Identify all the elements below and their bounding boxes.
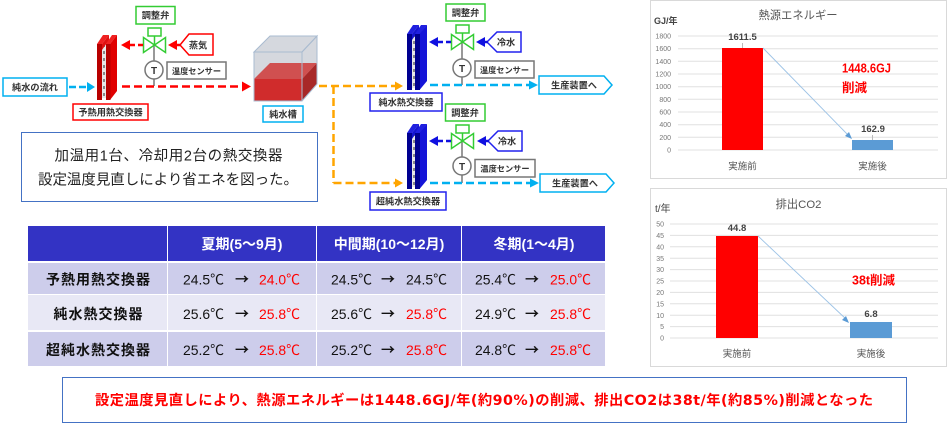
label: temperature sensor [167, 62, 226, 79]
row: preheat exchanger: 25.4℃ [475, 272, 516, 288]
icon: valve and temperature sensor [452, 25, 474, 85]
icon: valve and temperature sensor [452, 125, 474, 183]
y axis labels: 1400 [655, 59, 671, 66]
arrows: cold water flow [429, 136, 489, 146]
callout: 38t reduction: 38t削減 [852, 272, 895, 288]
row: preheat exchanger: 24.5℃ [183, 272, 224, 288]
bar: before [722, 48, 763, 150]
y axis labels: 20 [656, 290, 664, 297]
y axis labels: 5 [660, 324, 664, 331]
label: control valve [446, 4, 485, 21]
row: preheat exchanger: → [235, 270, 249, 290]
value labels: 1611.5 [728, 32, 757, 43]
y axis labels: 1000 [655, 84, 671, 91]
axis unit: t/年 [655, 202, 671, 215]
y axis labels: 400 [659, 122, 671, 129]
label: ultra-pure water exchanger [370, 192, 446, 210]
arrows: orange supply lines [319, 82, 403, 188]
y axis labels: 45 [656, 233, 664, 240]
label: temperature sensor: 温度センサー [480, 65, 529, 75]
row: ultra-pure water exchanger: 超純水熱交換器 [46, 342, 150, 358]
callout: 1448.6GJ reduction: 削減 [842, 80, 868, 95]
row: preheat exchanger: 24.0℃ [259, 272, 300, 288]
label: control valve [136, 6, 175, 24]
chart title: 排出CO2 [776, 197, 821, 211]
y axis labels: 1600 [655, 46, 671, 53]
y axis labels: 1200 [655, 72, 671, 78]
row: pure water exchanger: → [381, 304, 395, 324]
callout: 1448.6GJ reduction: 1448.6GJ [842, 62, 891, 76]
bar chart: CO2 emissions [650, 188, 946, 366]
row: preheat exchanger: → [381, 270, 395, 290]
row: pure water exchanger: 25.8℃ [406, 306, 447, 322]
y axis labels: 35 [656, 256, 664, 263]
y axis labels: 1800 [655, 34, 671, 40]
icon: valve and temperature sensor: T [151, 66, 157, 77]
label: temperature sensor: 温度センサー [172, 66, 221, 76]
y axis labels: 200 [659, 135, 671, 142]
y axis labels: 30 [656, 267, 664, 274]
row: pure water exchanger: 25.6℃ [331, 306, 372, 322]
label: control valve: 調整弁 [142, 10, 169, 20]
label: cold water: 冷水 [498, 136, 516, 146]
label: pure water tank: 純水槽 [269, 108, 297, 120]
row: ultra-pure water exchanger: 25.2℃ [331, 342, 372, 358]
label: control valve: 調整弁 [452, 7, 479, 18]
y axis labels [656, 222, 664, 342]
row: ultra-pure water exchanger: 25.2℃ [183, 342, 224, 358]
label: preheat exchanger: 予熱用熱交換器 [78, 106, 143, 118]
row: pure water exchanger: 純水熱交換器 [54, 306, 142, 322]
arrows: cold water flow [429, 37, 488, 47]
callout: conclusion [62, 378, 906, 422]
bar chart: heat source energy [650, 0, 946, 178]
y axis labels: 40 [656, 244, 664, 252]
chart title: 熱源エネルギー [758, 8, 838, 22]
icon: ultra-pure water exchanger [407, 124, 427, 189]
label: to production equipment: 生産装置へ [552, 178, 598, 188]
y axis labels: 800 [659, 97, 671, 104]
row: preheat exchanger: → [525, 270, 539, 290]
row: ultra-pure water exchanger: → [235, 340, 249, 360]
row: ultra-pure water exchanger: 24.8℃ [475, 342, 516, 358]
category labels [723, 348, 886, 360]
label: steam [180, 34, 213, 55]
y axis labels: 25 [656, 278, 664, 286]
row: pure water exchanger [28, 295, 605, 330]
icon: valve and temperature sensor: T [459, 162, 465, 173]
bar: after [850, 322, 892, 338]
row: ultra-pure water exchanger: → [525, 340, 539, 360]
y axis labels: 600 [659, 110, 671, 116]
table header: 冬期(1～4月) [494, 236, 574, 252]
table header: 中間期(10～12月) [334, 236, 444, 252]
label: steam: 蒸気 [189, 40, 207, 50]
arrow: to production equipment [430, 80, 538, 90]
axis unit: GJ/年 [654, 15, 678, 26]
label: temperature sensor [475, 61, 534, 78]
icon: pure water exchanger [407, 25, 427, 90]
row: ultra-pure water exchanger: 25.8℃ [550, 342, 591, 358]
y axis labels: 0 [660, 336, 664, 342]
row: preheat exchanger: 25.0℃ [550, 272, 591, 288]
category labels: 実施後 [857, 348, 886, 360]
unit: pure water heat exchanger [370, 4, 612, 111]
label: preheat exchanger [73, 104, 148, 120]
row: pure water exchanger: → [525, 304, 539, 324]
table header [28, 226, 605, 261]
text block: explanation note: 設定温度見直しにより省エネを図った。 [38, 172, 298, 188]
label: to production equipment [539, 76, 612, 94]
row: pure water exchanger: 24.9℃ [475, 306, 516, 322]
callout: 1448.6GJ reduction [842, 62, 891, 95]
label: temperature sensor: 温度センサー [480, 164, 530, 174]
label: to production equipment: 生産装置へ [551, 80, 597, 90]
arrow: reduction trend [758, 236, 849, 323]
row: ultra-pure water exchanger: 25.8℃ [259, 342, 300, 358]
y axis labels: 10 [656, 313, 664, 320]
row: ultra-pure water exchanger: 25.8℃ [406, 342, 447, 358]
label: ultra-pure water exchanger: 超純水熱交換器 [376, 196, 441, 206]
row: pure water exchanger: 25.8℃ [259, 306, 300, 322]
category labels [728, 160, 887, 172]
unit: ultra-pure water heat exchanger [370, 104, 614, 210]
value labels [728, 223, 878, 320]
panel: temperature setting table [28, 226, 605, 366]
category labels: 実施前 [728, 160, 757, 172]
label: cold water [487, 32, 521, 52]
row: ultra-pure water exchanger [28, 332, 605, 366]
bar: after [852, 140, 893, 150]
y axis labels: 0 [667, 148, 671, 154]
icon: preheat heat exchanger [97, 35, 117, 100]
arrows: steam flow [121, 40, 180, 50]
label: temperature sensor [475, 160, 535, 177]
row: preheat exchanger: 24.5℃ [406, 272, 447, 288]
row: pure water exchanger: 25.6℃ [183, 306, 224, 322]
text block: explanation note [22, 132, 318, 202]
arrow: reduction trend [763, 48, 852, 139]
label: pure water exchanger [370, 93, 442, 111]
label: control valve [446, 104, 485, 121]
label: pure water tank [263, 106, 303, 122]
category labels: 実施前 [723, 348, 751, 360]
value labels: 44.8 [728, 223, 746, 234]
bar: before [716, 236, 758, 338]
heat transfer flow: pure water inlet [3, 78, 95, 96]
value labels [728, 32, 885, 140]
row: pure water exchanger: → [235, 304, 249, 324]
arrow: heated water to tank [122, 82, 251, 92]
label: pure water exchanger: 純水熱交換器 [378, 96, 434, 108]
text block: explanation note: 加温用1台、冷却用2台の熱交換器 [54, 148, 283, 164]
label: control valve: 調整弁 [451, 107, 479, 118]
category labels: 実施後 [858, 160, 887, 172]
value labels: 162.9 [861, 124, 885, 135]
y axis labels: 15 [656, 302, 664, 308]
row: preheat exchanger: 24.5℃ [331, 272, 372, 288]
icon: valve and temperature sensor [144, 28, 166, 86]
value labels: 6.8 [864, 309, 878, 320]
label: cold water [488, 131, 522, 151]
row: pure water exchanger: 25.8℃ [550, 306, 591, 322]
y axis labels [655, 34, 671, 154]
icon: pure water tank [254, 36, 317, 101]
table header: 夏期(5～9月) [202, 236, 282, 252]
row: preheat exchanger: 予熱用熱交換器 [46, 272, 150, 288]
icon: valve and temperature sensor: T [459, 64, 465, 75]
row: ultra-pure water exchanger: → [381, 340, 395, 360]
y axis labels: 50 [656, 222, 664, 228]
panel: process diagram [3, 4, 614, 210]
heat transfer flow: pure water inlet: 純水の流れ [12, 82, 58, 92]
row: preheat exchanger [28, 263, 605, 294]
arrow: to production equipment [430, 178, 539, 188]
label: cold water: 冷水 [497, 36, 515, 48]
label: to production equipment [540, 174, 614, 192]
callout: conclusion: 設定温度見直しにより、熱源エネルギーは1448.6GJ/年(約90%)の削減、排出CO2は38t/年(約85%)削減となった [95, 391, 873, 409]
